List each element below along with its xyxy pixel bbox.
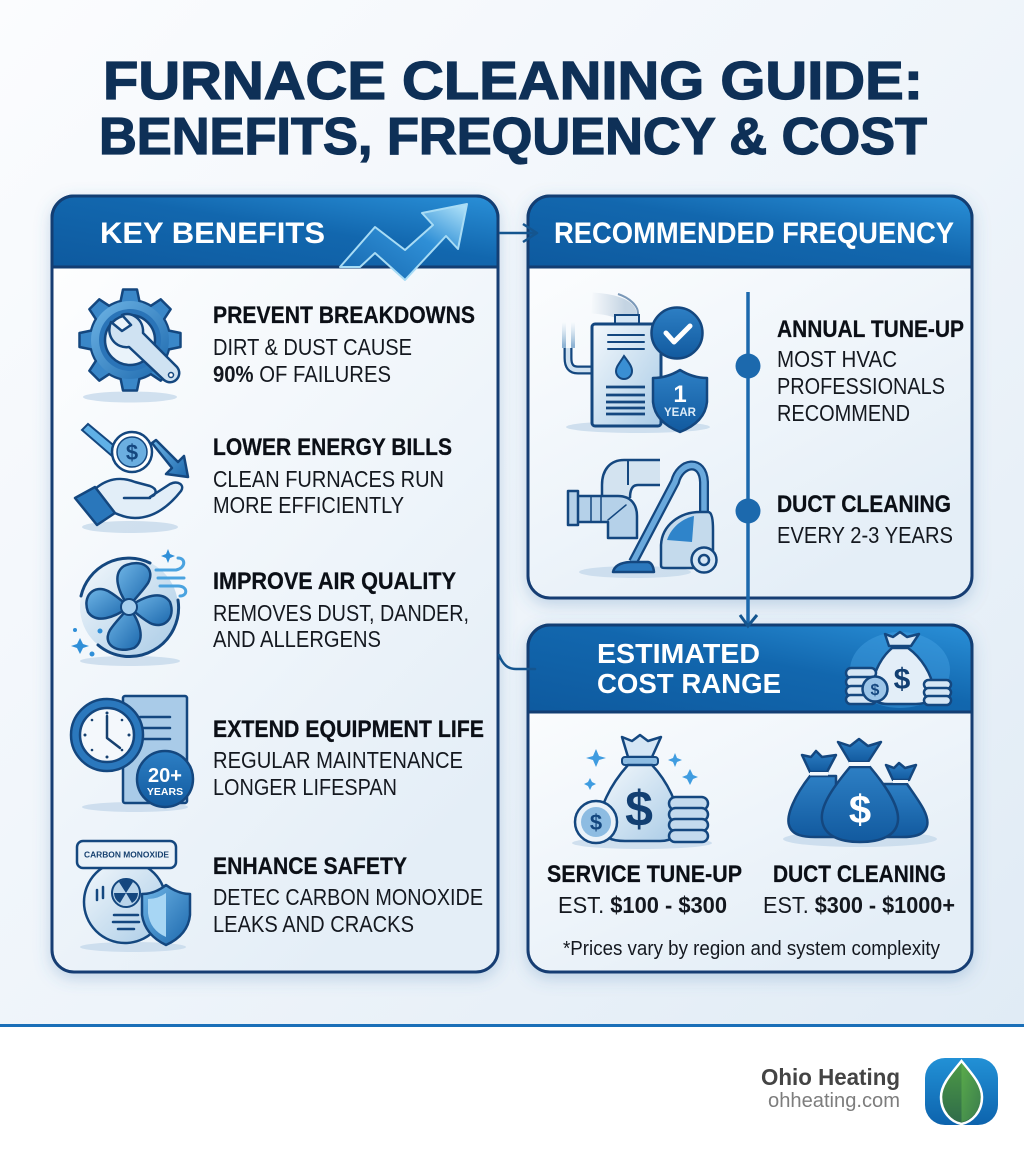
icon: money bag, coin and stack: $ — [590, 810, 602, 835]
panel body: cost range — [528, 625, 972, 972]
footnote: *Prices vary by region and system complexity — [563, 938, 940, 960]
text: improve air quality: IMPROVE AIR QUALITY — [213, 568, 456, 595]
text: duct cleaning: EVERY 2-3 YEARS — [777, 522, 953, 548]
icon: rising arrow — [340, 204, 467, 280]
icon: gear and wrench — [80, 290, 180, 402]
icon: hand with coin and down arrow — [75, 424, 188, 533]
text: enhance safety: DETEC CARBON MONOXIDE — [213, 884, 483, 910]
text: duct cleaning: DUCT CLEANING — [777, 491, 951, 518]
arrow: key benefits to frequency — [499, 224, 537, 242]
header: cost range — [528, 625, 972, 712]
text: duct cleaning price: EST. $300 - $1000+ — [763, 892, 955, 918]
icon: money bag, coin and stack — [572, 735, 712, 849]
text: lower energy bills — [213, 434, 452, 518]
icon: furnace with 1 year badge: 1 — [673, 381, 687, 408]
text: lower energy bills: CLEAN FURNACES RUN — [213, 466, 444, 492]
header: recommended frequency: RECOMMENDED FREQUENCY — [554, 217, 954, 250]
benefit: lower energy bills — [75, 424, 452, 533]
text: duct cleaning — [777, 491, 953, 548]
brand name: Ohio Heating — [761, 1064, 900, 1090]
benefit: prevent breakdowns — [80, 290, 475, 402]
text: annual tune-up: PROFESSIONALS — [777, 373, 945, 399]
text: service tune-up price — [547, 861, 742, 918]
text: prevent breakdowns: DIRT & DUST CAUSE — [213, 334, 412, 360]
icon: fan with air flow — [71, 549, 186, 666]
text: prevent breakdowns: 90% OF FAILURES — [213, 361, 391, 387]
text: duct cleaning price: DUCT CLEANING — [773, 861, 946, 888]
text: extend equipment life: EXTEND EQUIPMENT LIFE — [213, 716, 484, 743]
text: annual tune-up: MOST HVAC — [777, 346, 897, 372]
text: prevent breakdowns — [213, 302, 475, 387]
icon: money bag with coins: $ — [871, 682, 880, 699]
header: cost range: ESTIMATED — [597, 638, 760, 669]
panel: estimated cost range — [528, 625, 972, 972]
text: service tune-up price: SERVICE TUNE-UP — [547, 861, 742, 888]
title: FURNACE CLEANING GUIDE: — [103, 51, 923, 111]
benefit: extend equipment life — [71, 696, 484, 812]
icon: three blue money bags — [783, 739, 937, 847]
logo: leaf — [925, 1058, 998, 1125]
text: service tune-up price: EST. $100 - $300 — [558, 892, 727, 918]
timeline connector: frequency to cost — [736, 292, 760, 626]
text: enhance safety — [213, 853, 483, 937]
text: extend equipment life — [213, 716, 484, 800]
text: extend equipment life: LONGER LIFESPAN — [213, 774, 397, 800]
icon: money bag with coins: $ — [894, 663, 911, 696]
header: key benefits: KEY BENEFITS — [100, 217, 325, 250]
text: enhance safety: LEAKS AND CRACKS — [213, 911, 414, 937]
text: lower energy bills: LOWER ENERGY BILLS — [213, 434, 452, 461]
icon: duct and vacuum — [568, 460, 716, 578]
text: annual tune-up: RECOMMEND — [777, 400, 910, 426]
brand url: ohheating.com — [768, 1090, 900, 1112]
panel: recommended frequency — [528, 196, 972, 598]
text: annual tune-up: ANNUAL TUNE-UP — [777, 316, 964, 343]
footer — [0, 1024, 1024, 1154]
text: prevent breakdowns: PREVENT BREAKDOWNS — [213, 302, 475, 329]
text: extend equipment life: REGULAR MAINTENANCE — [213, 747, 463, 773]
benefit: enhance safety — [77, 841, 483, 952]
benefit: improve air quality — [71, 549, 469, 666]
text: improve air quality: REMOVES DUST, DANDER, — [213, 600, 469, 626]
icon: clock, manual and 20+ years badge — [71, 696, 193, 812]
text: annual tune-up — [777, 316, 964, 426]
icon: clock, manual and 20+ years badge: YEARS — [147, 786, 183, 798]
icon: furnace with 1 year badge — [564, 294, 710, 433]
icon: carbon monoxide detector and shield: CARBON MONOXIDE — [84, 850, 170, 860]
icon: three blue money bags: $ — [849, 788, 871, 832]
header: recommended frequency — [528, 196, 972, 267]
text: improve air quality: AND ALLERGENS — [213, 626, 381, 652]
text: improve air quality — [213, 568, 469, 652]
text: lower energy bills: MORE EFFICIENTLY — [213, 492, 404, 518]
icon: hand with coin and down arrow: $ — [126, 440, 138, 465]
title — [99, 51, 927, 166]
icon: money bag, coin and stack: $ — [625, 781, 653, 837]
icon: furnace with 1 year badge: YEAR — [664, 407, 697, 419]
arrow: key benefits to cost range — [499, 655, 535, 669]
panel: key benefits — [52, 196, 498, 972]
icon: money bag with coins — [846, 632, 951, 708]
icon: clock, manual and 20+ years badge: 20+ — [148, 765, 182, 787]
header: key benefits — [52, 196, 498, 280]
text: duct cleaning price — [763, 861, 955, 918]
title: BENEFITS, FREQUENCY & COST — [99, 108, 927, 166]
icon: carbon monoxide detector and shield — [77, 841, 190, 952]
header: cost range: COST RANGE — [597, 668, 781, 699]
panel body: key benefits — [52, 196, 498, 972]
panel body: recommended frequency — [528, 196, 972, 598]
text: enhance safety: ENHANCE SAFETY — [213, 853, 407, 880]
